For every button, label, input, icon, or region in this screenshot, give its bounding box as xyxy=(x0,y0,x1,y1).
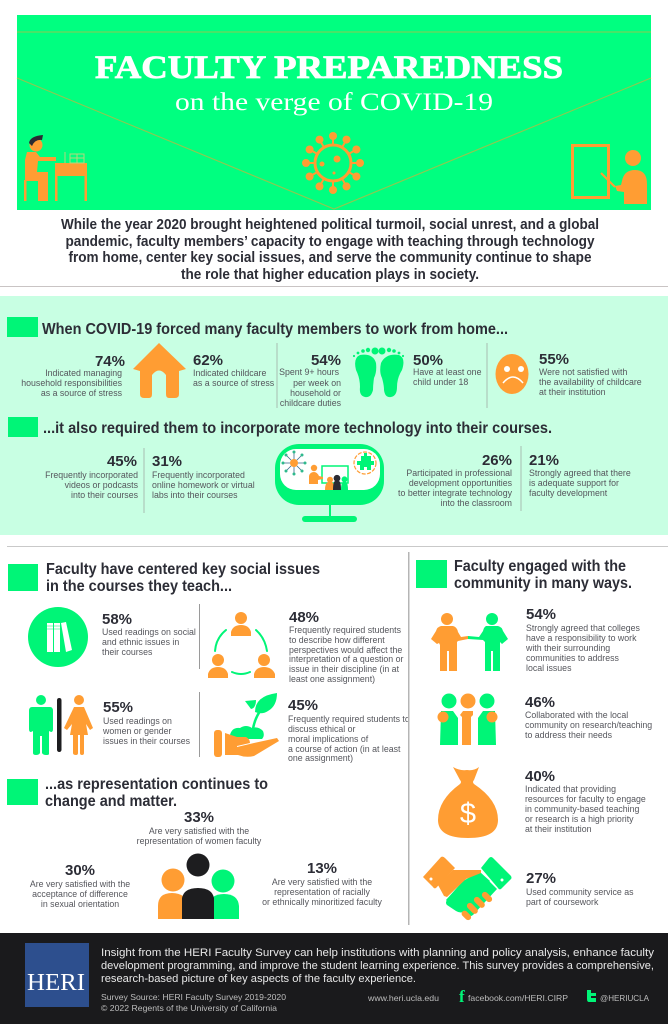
stat: 13%: Are very satisfied with the xyxy=(272,877,372,887)
survey source xyxy=(101,992,286,1013)
stat: 58%: 58% xyxy=(102,611,132,628)
stat: 46%: Collaborated with the local xyxy=(525,710,628,720)
stat: 33% xyxy=(137,809,262,846)
stat: 62% xyxy=(193,352,275,388)
footer description: development programming, and improve the student learning experience. This survey provides a comprehensive, xyxy=(101,960,654,972)
stat: 58%: and ethnic issues in xyxy=(102,637,179,647)
panel: social issues xyxy=(8,561,410,763)
stat: 45% ethical: discuss ethical or xyxy=(288,724,356,734)
stat: 62%: Indicated childcare xyxy=(193,368,266,378)
stat: 55% women xyxy=(102,699,191,746)
footer description: Insight from the HERI Faculty Survey can help institutions with planning and policy analysis, enhance faculty xyxy=(101,947,655,959)
stat: 13%: 13% xyxy=(307,860,337,877)
stat: 74%: 74% xyxy=(95,353,125,370)
panel: community xyxy=(416,558,652,921)
icon: three people xyxy=(158,854,239,919)
stat: 54% xyxy=(279,352,342,408)
stat: 33%: representation of women faculty xyxy=(137,836,262,846)
logo: HERI: HERI xyxy=(27,970,85,996)
stat: 48%: Frequently required students xyxy=(289,625,402,635)
icon: books xyxy=(28,607,88,667)
stat: 55% women: Used readings on xyxy=(103,716,172,726)
header banner xyxy=(17,15,651,210)
stat: 45% ethical: moral implications of xyxy=(288,734,369,744)
stat: 31% xyxy=(152,453,255,500)
stat: 31%: Frequently incorporated xyxy=(152,470,245,480)
panel: work from home and technology xyxy=(0,296,668,535)
stat: 26% xyxy=(398,452,513,508)
stat: 40%: or research is a high priority xyxy=(525,814,634,824)
footer description xyxy=(101,947,655,985)
stat: 40%: in community-based teaching xyxy=(525,804,640,814)
stat: 50%: 50% xyxy=(413,352,443,369)
stat: 58%: Used readings on social xyxy=(102,627,196,637)
intro text: While the year 2020 brought heightened political turmoil, social unrest, and a global xyxy=(61,216,599,233)
stat: 40% xyxy=(525,768,646,834)
stat: 45% ethical: a course of action (in at least xyxy=(288,744,401,754)
stat: 55% childcare: Were not satisfied with xyxy=(539,367,627,377)
stat: 33%: 33% xyxy=(184,809,214,826)
stat: 30%: 30% xyxy=(65,862,95,879)
panel: representation xyxy=(7,776,382,919)
stat: 48%: issue in their discipline (in at xyxy=(289,664,400,674)
stat: 40%: Indicated that providing xyxy=(525,784,616,794)
stat: 26%: Participated in professional xyxy=(406,468,512,478)
stat: 26%: 26% xyxy=(482,452,512,469)
intro text xyxy=(61,216,599,283)
facebook xyxy=(459,987,568,1006)
stat: 45% videos: videos or podcasts xyxy=(65,480,139,490)
stat: 26%: to better integrate technology xyxy=(398,488,513,498)
stat: 54% community xyxy=(525,606,641,673)
icon: two people shaking hands xyxy=(431,613,508,671)
stat: 54%: 54% xyxy=(311,352,341,369)
stat: 48%: perspectives would affect the xyxy=(289,645,402,655)
icon: community group xyxy=(438,694,498,745)
stat: 54%: household or xyxy=(290,388,341,398)
stat: 46% xyxy=(525,694,652,740)
stat: 40%: at their institution xyxy=(525,824,592,834)
stat: 54%: Spent 9+ hours xyxy=(279,367,340,377)
footer description: research-based picture of key aspects of the faculty experience. xyxy=(101,973,416,985)
stat: 27%: part of coursework xyxy=(526,897,599,907)
icon: plant in hand xyxy=(214,693,279,757)
icon: monitor xyxy=(275,444,384,522)
stat: 26%: into the classroom xyxy=(441,498,512,508)
heading: social issues: in the courses they teach... xyxy=(46,578,232,595)
heading: social issues xyxy=(8,561,320,595)
stat: 45% videos: Frequently incorporated xyxy=(45,470,138,480)
website: www.heri.ucla.edu xyxy=(367,993,439,1003)
twitter xyxy=(587,990,649,1003)
facebook: facebook.com/HERI.CIRP xyxy=(468,993,568,1003)
icon: money bag xyxy=(438,767,498,838)
stat: 54% community: with their surrounding xyxy=(525,643,610,653)
icon: discussion circle xyxy=(208,612,275,678)
stat: 54% community: local issues xyxy=(526,663,572,673)
twitter: @HERIUCLA xyxy=(600,993,649,1003)
stat: 54% community: communities to address xyxy=(526,653,619,663)
icon: man and woman xyxy=(29,695,93,755)
stat: 31%: 31% xyxy=(152,453,182,470)
stat: 21%: faculty development xyxy=(529,488,608,498)
stat: 21%: is adequate support for xyxy=(529,478,619,488)
stat: 30%: in sexual orientation xyxy=(41,899,119,909)
stat: 54% community: have a responsibility to work xyxy=(526,633,637,643)
stat: 33%: Are very satisfied with the xyxy=(149,826,249,836)
stat: 58% xyxy=(102,611,196,657)
stat: 55% childcare: 55% xyxy=(539,351,569,368)
stat: 55% women: issues in their courses xyxy=(103,736,191,746)
stat: 74%: household responsibilities xyxy=(21,378,123,388)
heading: representation xyxy=(7,776,268,810)
stat: 45% ethical xyxy=(288,697,410,763)
title: FACULTY PREPAREDNESS xyxy=(95,50,563,86)
stat: 48%: interpretation of a question or xyxy=(289,654,404,664)
icon: sad face xyxy=(496,354,528,394)
stat: 58%: their courses xyxy=(102,647,153,657)
stat: 27%: Used community service as xyxy=(526,887,634,897)
icon: house xyxy=(133,343,186,398)
stat: 30%: Are very satisfied with the xyxy=(30,879,130,889)
stat: 31%: online homework or virtual xyxy=(152,480,255,490)
heading: representation: change and matter. xyxy=(45,793,177,810)
logo: HERI xyxy=(25,943,89,1007)
stat: 48%: to describe how different xyxy=(289,635,385,645)
stat: 45% videos xyxy=(45,453,139,500)
intro text: pandemic, faculty members’ capacity to engage with teaching through technology xyxy=(66,233,595,250)
stat: 54%: childcare duties xyxy=(280,398,342,408)
heading: community xyxy=(416,558,632,592)
stat: 50%: child under 18 xyxy=(413,377,468,387)
stat: 40%: 40% xyxy=(525,768,555,785)
stat: 55% childcare: at their institution xyxy=(539,387,606,397)
stat: 21%: 21% xyxy=(529,452,559,469)
heading: technology: ...it also required them to incorporate more technology into their courses. xyxy=(43,420,552,437)
stat: 48%: 48% xyxy=(289,609,319,626)
stat: 45% ethical: 45% xyxy=(288,697,318,714)
stat: 13%: representation of racially xyxy=(274,887,371,897)
stat: 48% xyxy=(289,609,404,684)
footer xyxy=(0,933,668,1024)
stat: 46%: 46% xyxy=(525,694,555,711)
stat: 55% childcare: the availability of childcare xyxy=(539,377,642,387)
stat: 30% xyxy=(30,862,130,909)
stat: 27%: 27% xyxy=(526,870,556,887)
stat: 13% xyxy=(262,860,382,907)
icon: teacher at board xyxy=(572,146,647,204)
stat: 26%: development opportunities xyxy=(409,478,513,488)
facebook: f xyxy=(459,987,465,1006)
stat: 13%: or ethnically minoritized faculty xyxy=(262,897,382,907)
icon: virus xyxy=(302,132,364,194)
stat: 45% ethical: Frequently required students to xyxy=(288,714,410,724)
stat: 50%: Have at least one xyxy=(413,367,482,377)
stat: 45% videos: 45% xyxy=(107,453,137,470)
subtitle: on the verge of COVID-19 xyxy=(175,89,493,116)
stat: 54% community: 54% xyxy=(526,606,556,623)
survey source: © 2022 Regents of the University of California xyxy=(101,1003,277,1013)
stat: 30%: acceptance of difference xyxy=(32,889,128,899)
stat: 21% xyxy=(529,452,631,498)
survey source: Survey Source: HERI Faculty Survey 2019-2020 xyxy=(101,992,286,1002)
heading: community: community in many ways. xyxy=(454,575,632,592)
stat: 55% women: women or gender xyxy=(102,726,172,736)
stat: 62%: 62% xyxy=(193,352,223,369)
heading: representation: ...as representation continues to xyxy=(45,776,268,793)
stat: 21%: Strongly agreed that there xyxy=(529,468,631,478)
stat: 27% xyxy=(526,870,634,907)
heading: work from home xyxy=(7,317,508,338)
heading: work from home: When COVID-19 forced many faculty members to work from home... xyxy=(42,321,508,338)
stat: 55% childcare xyxy=(539,351,642,397)
stat: 55% women: 55% xyxy=(103,699,133,716)
stat: 40%: resources for faculty to engage xyxy=(525,794,646,804)
icon: footprints xyxy=(353,348,404,397)
stat: 54% community: Strongly agreed that colleges xyxy=(526,623,641,633)
icon: money bag: $ xyxy=(460,798,476,830)
stat: 62%: as a source of stress xyxy=(193,378,275,388)
stat: 31%: labs into their courses xyxy=(152,490,238,500)
stat: 46%: to address their needs xyxy=(525,730,613,740)
heading: community: Faculty engaged with the xyxy=(454,558,626,575)
stat: 46%: community on research/teaching xyxy=(525,720,652,730)
icon: person at desk xyxy=(24,135,87,201)
icon: handshake xyxy=(423,857,512,921)
heading: social issues: Faculty have centered key social issues xyxy=(46,561,320,578)
stat: 54%: per week on xyxy=(293,378,341,388)
stat: 50% xyxy=(413,352,482,387)
intro text: from home, center key social issues, and serve the community continue to shape xyxy=(68,249,592,266)
stat: 45% ethical: one assignment) xyxy=(288,753,353,763)
intro text: the role that higher education plays in society. xyxy=(181,266,479,283)
stat: 45% videos: into their courses xyxy=(71,490,139,500)
stat: 48%: least one assignment) xyxy=(289,674,375,684)
stat: 74%: as a source of stress xyxy=(41,388,123,398)
stat: 74% xyxy=(21,353,125,398)
stat: 74%: Indicated managing xyxy=(45,368,122,378)
